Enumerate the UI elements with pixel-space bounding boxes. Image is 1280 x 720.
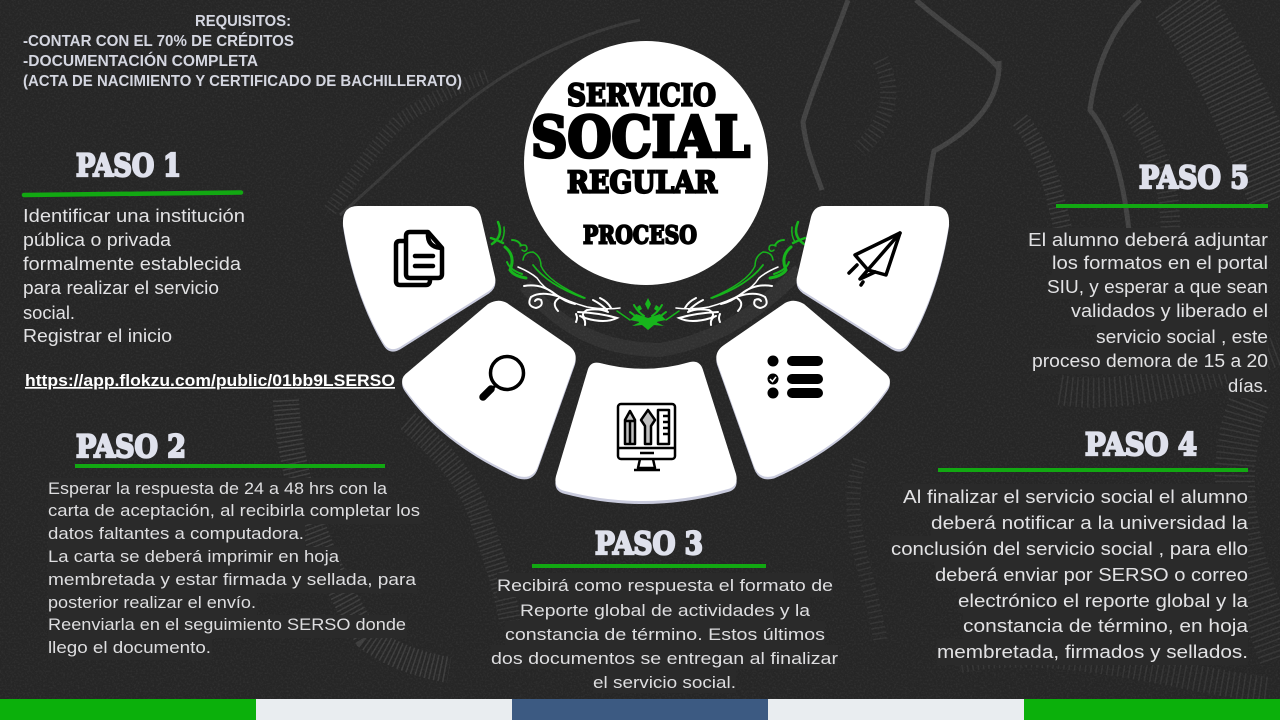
- step 2 text: [48, 478, 421, 660]
- icon: monitor with tools: [618, 404, 675, 470]
- step 1 text: [23, 205, 245, 346]
- step 2 text: carta de aceptación, al recibirla completar los: [48, 501, 420, 520]
- step 5 underline: [1056, 204, 1268, 208]
- step 5 text: El alumno deberá adjuntar: [1028, 229, 1268, 250]
- card 1: documents: [343, 206, 495, 352]
- step 3 heading: PASO 3: [595, 526, 703, 562]
- step 3: [491, 526, 838, 693]
- step 1 text: formalmente establecida: [23, 253, 242, 274]
- step 1 text: social.: [23, 302, 75, 323]
- process label: PROCESO: [583, 220, 697, 250]
- step 1: [23, 148, 395, 390]
- step 2 text: llego el documento.: [48, 638, 211, 657]
- step 3 text: Reporte global de actividades y la: [520, 601, 811, 620]
- title circle: [524, 41, 768, 285]
- step 4 text: membretada, firmados y sellados.: [937, 641, 1248, 662]
- title circle: SOCIAL: [531, 104, 750, 170]
- step 1 text: Registrar el inicio: [23, 325, 172, 346]
- icon: magnifier: [483, 356, 524, 397]
- step 4 underline: [938, 468, 1248, 472]
- step 3 text: [491, 573, 838, 693]
- step 4 text: deberá notificar a la universidad la: [931, 512, 1249, 533]
- step 2 heading: PASO 2: [76, 429, 186, 465]
- step 1 underline: [24, 192, 241, 195]
- decorative flourish: [491, 222, 805, 330]
- step 2 text: membretada y estar firmada y sellada, para: [48, 570, 417, 589]
- icon: documents: [396, 232, 442, 285]
- card 2: search: [402, 301, 576, 479]
- step 5 heading: PASO 5: [1139, 160, 1249, 196]
- icon: paper plane: [849, 233, 900, 285]
- step 4 text: conclusión del servicio social , para ello: [891, 538, 1248, 559]
- requirements text: -CONTAR CON EL 70% DE CRÉDITOS: [23, 31, 294, 50]
- step 3 text: dos documentos se entregan al finalizar: [491, 649, 838, 668]
- step 2 text: La carta se deberá imprimir en hoja: [48, 547, 340, 566]
- registration link: https://app.flokzu.com/public/01bb9LSERSO: [25, 371, 395, 390]
- step 1 text: Identificar una institución: [23, 205, 245, 226]
- step 2 text: Reenviarla en el seguimiento SERSO donde: [48, 615, 406, 634]
- step 4 text: deberá enviar por SERSO o correo: [935, 564, 1248, 585]
- requirements text: (ACTA DE NACIMIENTO Y CERTIFICADO DE BACHILLERATO): [23, 73, 462, 90]
- step 4: [891, 427, 1249, 665]
- title circle: REGULAR: [567, 166, 718, 200]
- step 5 text: SIU, y esperar a que sean: [1047, 276, 1268, 297]
- step 2 text: posterior realizar el envío.: [48, 593, 256, 612]
- step 5 text: [1028, 228, 1268, 398]
- requirements text: [23, 13, 462, 90]
- step 3 text: constancia de término. Estos últimos: [505, 625, 825, 644]
- card 4: checklist: [716, 301, 890, 479]
- step 5 text: validados y liberado el: [1071, 300, 1268, 321]
- requirements text: -DOCUMENTACIÓN COMPLETA: [23, 51, 258, 70]
- step 1 text: pública o privada: [23, 229, 172, 250]
- step 2 underline: [75, 464, 385, 468]
- card 5: paper plane: [797, 206, 949, 352]
- step 5 text: servicio social , este: [1096, 326, 1268, 347]
- engraved lines: [286, 0, 1280, 690]
- step 4 text: Al finalizar el servicio social el alumno: [903, 486, 1248, 507]
- icon: checklist: [768, 356, 823, 398]
- step 4 text: electrónico el reporte global y la: [958, 590, 1249, 611]
- step 2 text: datos faltantes a computadora.: [48, 524, 304, 543]
- step 3 text: Recibirá como respuesta el formato de: [497, 576, 833, 595]
- step 3 text: el servicio social.: [593, 673, 736, 692]
- step 2: [48, 429, 421, 660]
- step 4 text: constancia de término, en hoja: [963, 615, 1249, 636]
- step 5: [1028, 160, 1268, 398]
- step 5 text: proceso demora de 15 a 20: [1032, 350, 1268, 371]
- card 3: design monitor: [555, 362, 737, 504]
- title lines: SERVICIO: [567, 78, 716, 114]
- flourish centre: [630, 298, 666, 330]
- step 1 heading: PASO 1: [76, 148, 181, 184]
- step 3 underline: [532, 564, 766, 568]
- step 4 heading: PASO 4: [1085, 427, 1197, 463]
- step 2 text: Esperar la respuesta de 24 a 48 hrs con la: [48, 479, 388, 498]
- step 5 text: días.: [1228, 375, 1268, 396]
- step 5 text: los formatos en el portal: [1052, 252, 1268, 273]
- requirements text: REQUISITOS:: [195, 13, 291, 30]
- step 4 text: [891, 484, 1249, 665]
- bottom colour band: [0, 699, 1280, 720]
- step 1 text: para realizar el servicio: [23, 277, 219, 298]
